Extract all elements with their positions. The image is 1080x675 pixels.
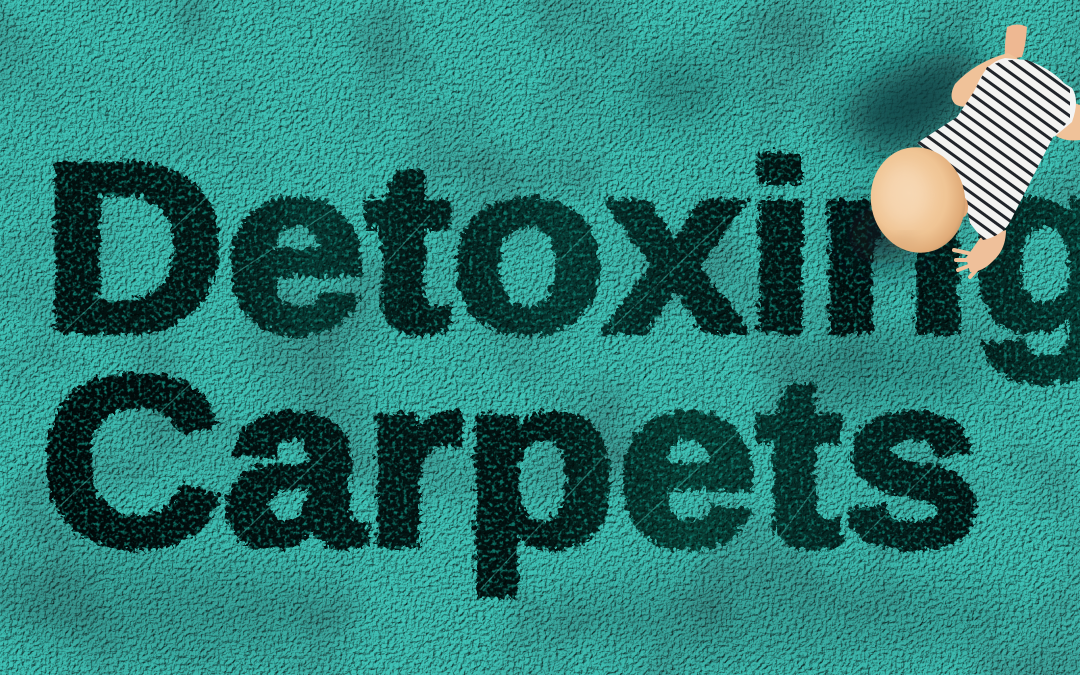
baby crawling bbox=[861, 24, 1080, 277]
baby shadow bbox=[845, 50, 985, 265]
diaper bbox=[975, 58, 1076, 137]
title line: Detoxing: Detoxing bbox=[39, 110, 1080, 378]
title line: Carpets: Carpets bbox=[37, 324, 979, 592]
title bbox=[37, 110, 1080, 592]
foot and leg bbox=[952, 24, 1027, 107]
arm and hand bbox=[954, 230, 1006, 277]
striped shirt bbox=[917, 60, 1070, 240]
other leg bbox=[1056, 100, 1080, 140]
baby head bbox=[861, 138, 975, 262]
